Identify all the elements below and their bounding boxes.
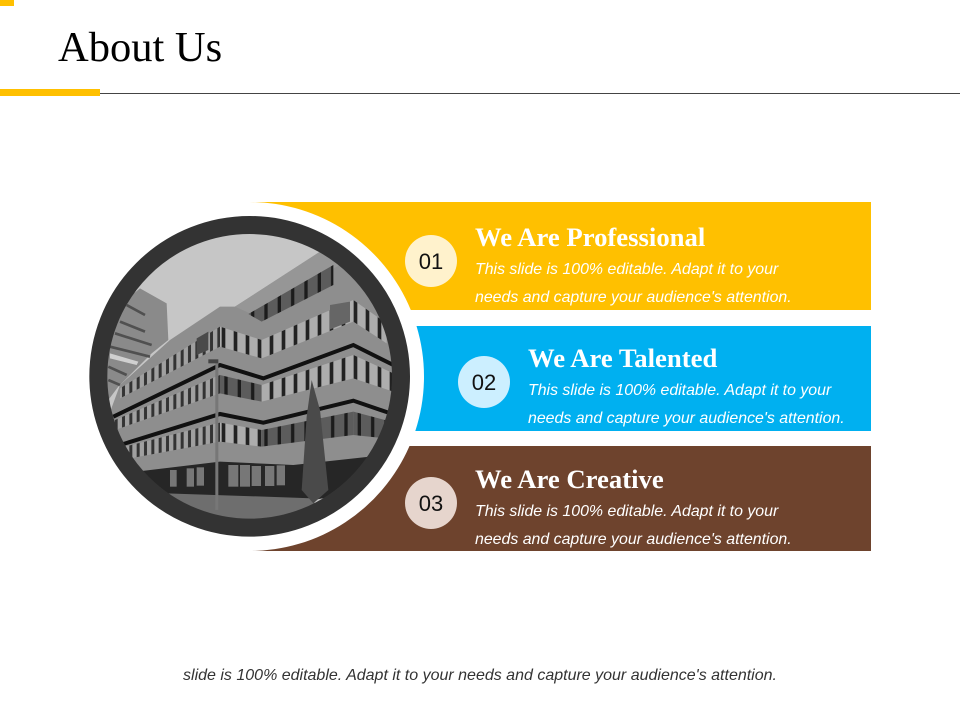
badge 02: 02 bbox=[472, 370, 496, 395]
footer text: slide is 100% editable. Adapt it to your needs and capture your audience's attention. bbox=[183, 667, 777, 684]
title: About Us bbox=[58, 24, 222, 71]
top floor windows bbox=[248, 265, 333, 322]
description: talented bbox=[528, 382, 845, 427]
badge 01: 01 bbox=[419, 249, 443, 274]
heading: talented: We Are Talented bbox=[528, 343, 717, 373]
badge 02 bbox=[458, 356, 510, 408]
description: creative: This slide is 100% editable. Adapt it to your bbox=[475, 503, 779, 520]
lamp post bbox=[208, 359, 218, 510]
dark ring bbox=[98, 225, 401, 528]
window row C bbox=[125, 412, 385, 458]
badge 03: 03 bbox=[419, 491, 443, 516]
badge 03 bbox=[405, 477, 457, 529]
main facade bbox=[111, 252, 392, 471]
description: talented: needs and capture your audience's attention. bbox=[528, 410, 845, 427]
header accent and rule bbox=[0, 0, 960, 96]
panel: we are talented bbox=[415, 326, 871, 431]
window row A bbox=[120, 300, 387, 398]
panel: we are professional bbox=[250, 202, 871, 310]
description: creative bbox=[475, 503, 792, 548]
panel: we are creative bbox=[250, 446, 871, 551]
heading: creative: We Are Creative bbox=[475, 464, 664, 494]
badge 01 bbox=[405, 235, 457, 287]
photo: office building in ring bbox=[98, 225, 401, 528]
roof slope bbox=[236, 252, 318, 306]
description: talented: This slide is 100% editable. Adapt it to your bbox=[528, 382, 832, 399]
heading: professional: We Are Professional bbox=[475, 222, 705, 252]
description: professional: This slide is 100% editable. Adapt it to your bbox=[475, 261, 779, 278]
background tower bbox=[107, 288, 168, 399]
description: professional bbox=[475, 261, 792, 306]
dark floor lines bbox=[113, 345, 393, 444]
tree bbox=[302, 380, 328, 503]
window row B bbox=[115, 355, 393, 430]
description: creative: needs and capture your audience's attention. bbox=[475, 531, 792, 548]
ground floor bbox=[137, 457, 370, 500]
description: professional: needs and capture your audience's attention. bbox=[475, 289, 792, 306]
pavement bbox=[169, 494, 314, 519]
